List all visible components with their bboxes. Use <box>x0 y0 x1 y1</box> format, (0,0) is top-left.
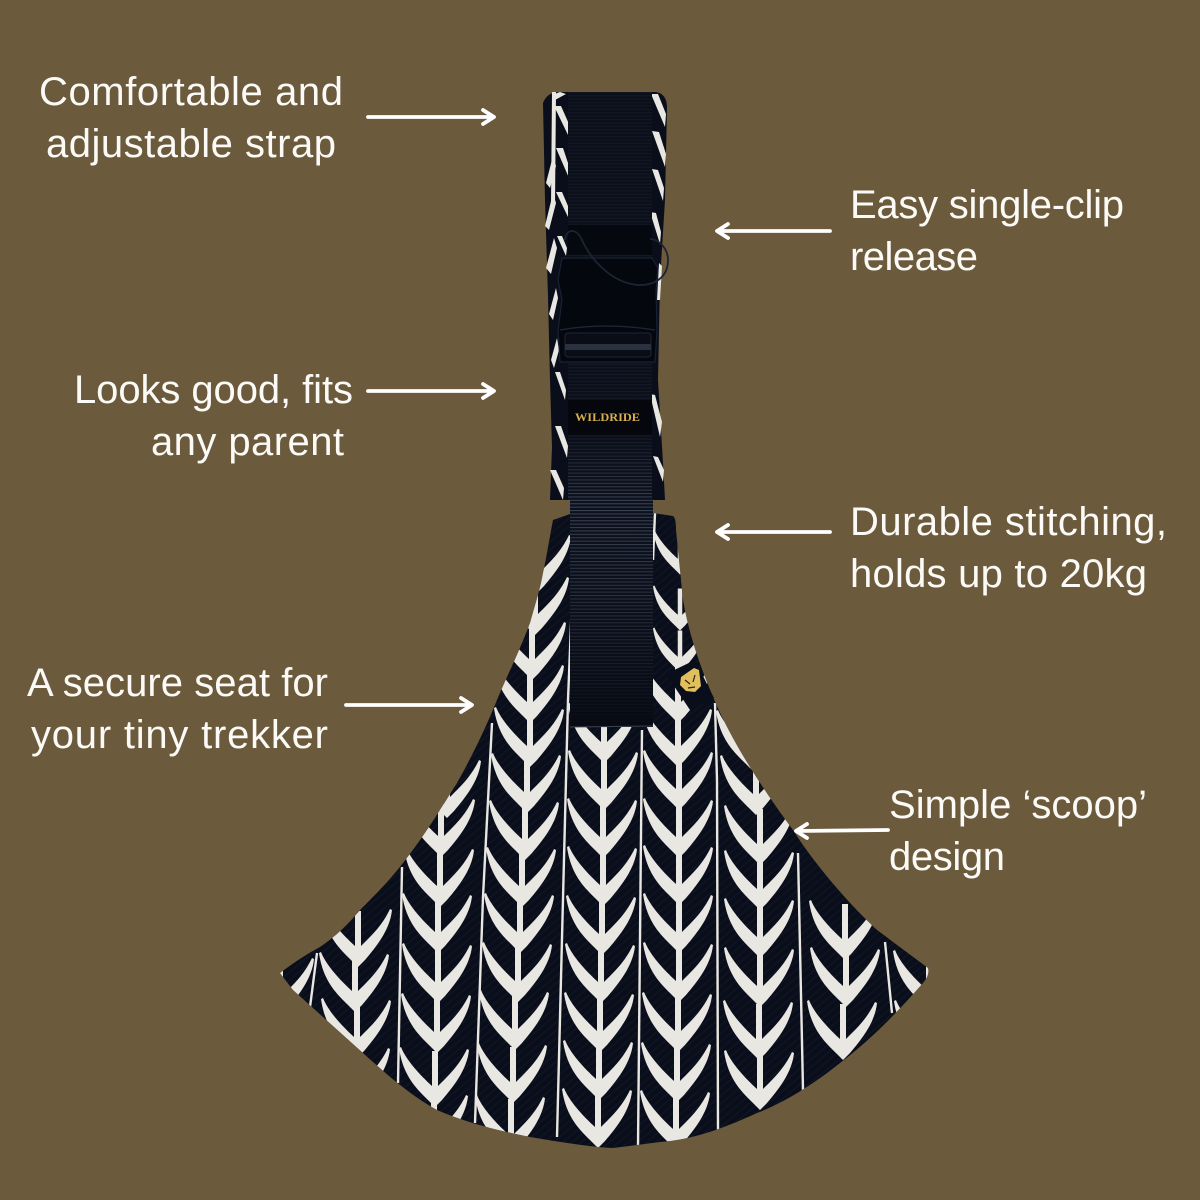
label: scoop design: Simple ‘scoop’ <box>889 783 1147 827</box>
label: single-clip release: release <box>850 235 978 279</box>
label: durable stitching: holds up to 20kg <box>850 552 1147 596</box>
WILDRIDE label: WILDRIDE <box>575 410 640 424</box>
label: comfortable strap <box>39 70 343 166</box>
lower webbing panel <box>570 498 653 727</box>
label: single-clip release <box>850 183 1124 279</box>
label: durable stitching: Durable stitching, <box>850 500 1167 544</box>
arrow: to label band <box>368 384 494 398</box>
label: secure seat: A secure seat for <box>27 661 328 705</box>
arrow: to strap <box>368 110 494 124</box>
arrow: to scoop <box>796 824 888 838</box>
label: scoop design <box>889 783 1147 879</box>
label: secure seat <box>27 661 328 757</box>
arrow: to clip <box>717 224 830 238</box>
buckle cord loop <box>565 231 668 285</box>
padded strap <box>543 92 668 500</box>
plastic buckle <box>558 258 658 362</box>
gold leopard logo tag <box>666 660 714 710</box>
label: single-clip release: Easy single-clip <box>850 183 1124 227</box>
label: comfortable strap: adjustable strap <box>46 122 336 166</box>
arrow: to stitching <box>717 525 830 539</box>
label: durable stitching <box>850 500 1167 596</box>
label: scoop design: design <box>889 835 1005 879</box>
label: secure seat: your tiny trekker <box>31 713 328 757</box>
webbing band <box>568 92 652 500</box>
label: fits any parent: Looks good, fits <box>74 368 353 412</box>
label: fits any parent <box>74 368 353 464</box>
sling seat: herringbone fabric <box>280 513 928 1148</box>
label: fits any parent: any parent <box>151 420 344 464</box>
label: comfortable strap: Comfortable and <box>39 70 343 114</box>
baby sling product <box>280 92 928 1148</box>
arrow: to seat <box>346 698 472 712</box>
